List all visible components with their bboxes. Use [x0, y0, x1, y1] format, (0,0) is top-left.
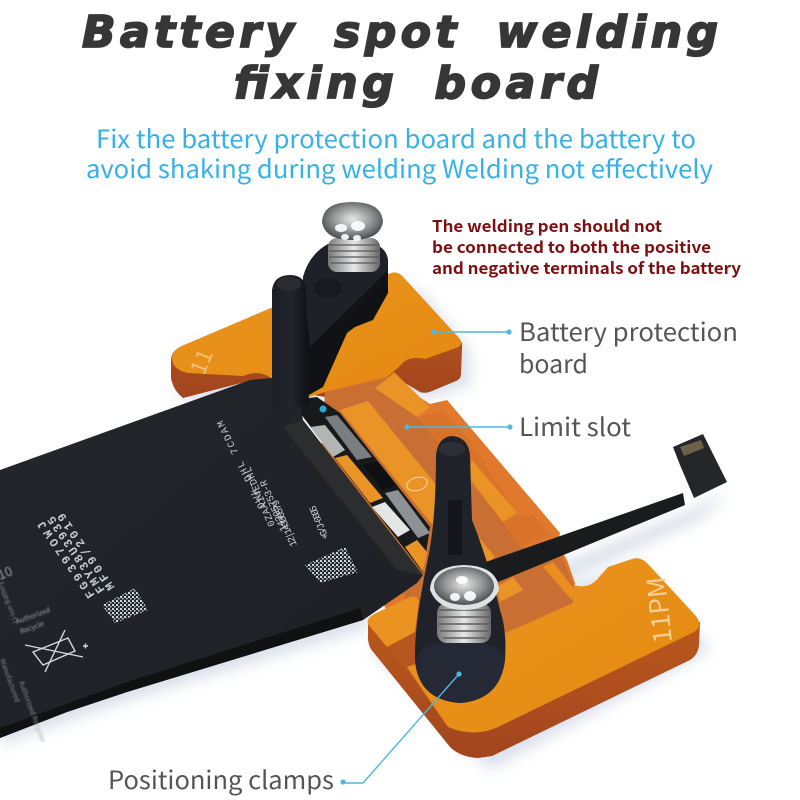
warning note	[432, 213, 741, 279]
clamp: upper	[272, 202, 388, 407]
battery label: right block: QWk-DHL 7CDAM	[215, 418, 269, 511]
lower lobe channel	[387, 632, 448, 727]
battery label: right block: +G/J-0005	[308, 503, 333, 541]
compliance text patches: Authorized	[15, 605, 52, 627]
battery label: right block: 0ZAA14EDHL	[244, 465, 279, 528]
limit strip C	[543, 562, 575, 600]
compliance text patches: Authorized Recycler	[16, 680, 48, 744]
title: fixing board	[234, 58, 598, 109]
compliance text patches	[0, 561, 52, 744]
limit strip B: lower	[466, 460, 517, 522]
callout: positioning clamps: Positioning clamps	[108, 761, 334, 797]
upper pin	[272, 275, 309, 407]
compliance text patches: Recycle	[19, 619, 46, 637]
battery label: right block	[215, 418, 333, 548]
board: lower lobe	[368, 558, 700, 758]
callout: battery protection board	[431, 313, 738, 381]
warning note: be connected to both the positive	[432, 234, 711, 258]
lower spring	[437, 603, 491, 643]
battery side shading	[283, 420, 423, 575]
lower screw head	[430, 565, 499, 610]
upper screw head	[322, 202, 383, 240]
callout: limit slot	[404, 408, 632, 444]
upper spring	[328, 238, 380, 272]
callout: battery protection board: board	[519, 345, 588, 381]
limit strip B: upper	[375, 372, 430, 417]
board: upper lobe	[171, 273, 462, 400]
battery label: left block: FMY38U3935	[45, 513, 108, 596]
data matrix: left	[102, 588, 148, 623]
clamp: lower	[415, 436, 505, 703]
subtitle: Fix the battery protection board and the battery to	[96, 120, 696, 156]
battery label: left block	[35, 510, 118, 601]
lower lobe top surface	[407, 558, 699, 732]
limit strip A	[340, 401, 495, 565]
battery	[0, 378, 423, 744]
title	[82, 7, 718, 109]
flex connector	[673, 434, 727, 498]
battery label: left block: FG9397OWJ	[35, 518, 98, 601]
mould mark: 11: 11	[181, 344, 220, 379]
data matrix: right	[305, 547, 358, 583]
callout: battery protection board: Battery protection	[519, 313, 738, 349]
battery label: right block: 14395753-R	[259, 478, 291, 533]
fixing board illustration	[0, 202, 727, 758]
warning note: and negative terminals of the battery	[432, 255, 741, 279]
flex cable	[483, 434, 727, 582]
board: central neck	[320, 372, 575, 665]
circuit strip	[290, 397, 430, 573]
lower lobe tab	[368, 596, 419, 647]
neck outer rim	[320, 376, 575, 665]
crossed-bin icon	[25, 630, 88, 672]
shadow under product	[0, 290, 730, 770]
subtitle: avoid shaking during welding Welding not effectively	[86, 150, 713, 186]
subtitle	[86, 120, 713, 186]
battery label: right block: 12|14300579	[270, 497, 301, 548]
callout: positioning clamps	[108, 671, 462, 797]
right recess	[417, 412, 550, 547]
warning note: The welding pen should not	[432, 213, 662, 237]
callout: limit slot: Limit slot	[519, 408, 632, 444]
mould mark: O	[405, 475, 429, 493]
limit slot	[320, 378, 573, 632]
lower lobe front bevel	[368, 598, 700, 758]
title: Battery spot welding	[82, 7, 718, 58]
mould mark: 11PM: 11PM	[636, 575, 680, 645]
battery label: left block: MF09/2019	[55, 510, 118, 593]
